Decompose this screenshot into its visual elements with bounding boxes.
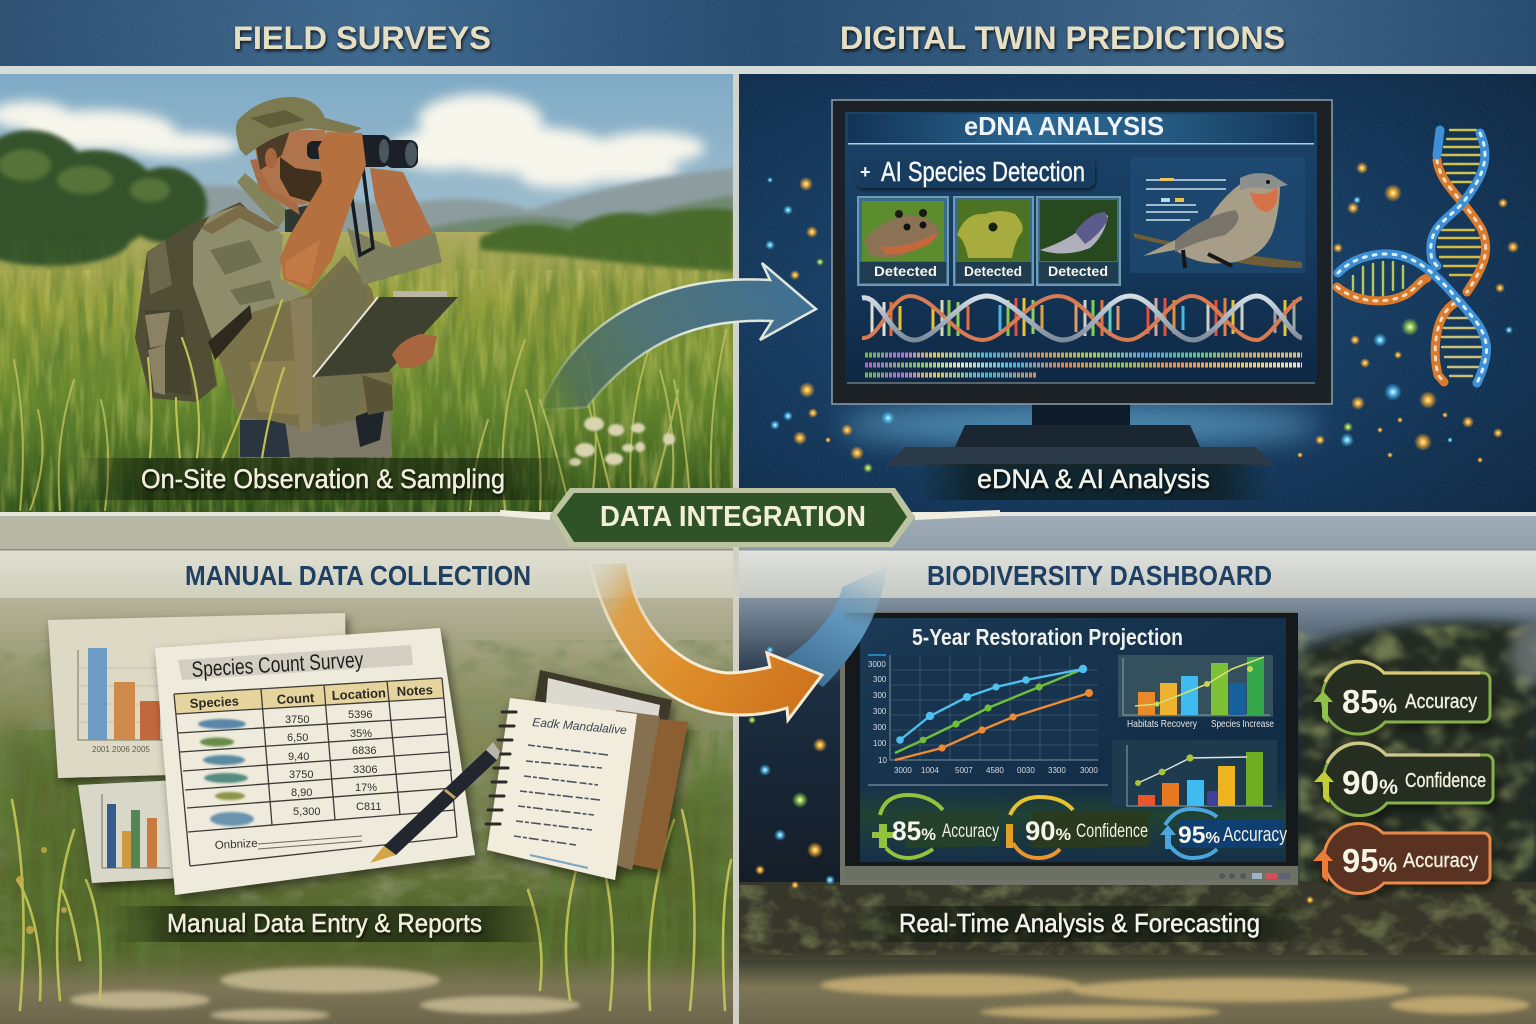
caption: on-site observation — [70, 458, 580, 500]
header band — [0, 0, 1536, 74]
line chart: projection: 1004 — [921, 766, 939, 775]
badge: 90% confidence: Confidence — [1405, 770, 1486, 792]
badge: 90% confidence: 90% — [1342, 764, 1398, 801]
binoculars — [307, 135, 418, 168]
form title: Species Count Survey — [191, 647, 364, 682]
DNA strand on screen — [862, 296, 1302, 340]
collar — [237, 173, 290, 228]
caption: manual data entry: Manual Data Entry & Reports — [167, 908, 482, 938]
caption: on-site observation: On-Site Observation & Sampling — [141, 464, 505, 494]
heading band: manual data collection: MANUAL DATA COLLECTION — [185, 560, 531, 591]
thumbnail: detected frog: Detected — [964, 263, 1022, 279]
caption: eDNA and AI analysis: eDNA & AI Analysis — [977, 464, 1210, 494]
line chart: projection: 10 — [878, 756, 887, 765]
grass in front of figure — [148, 300, 284, 460]
monitor stand — [885, 400, 1276, 466]
line chart: projection: 100 — [873, 739, 887, 748]
vest and torso — [213, 255, 393, 425]
banner: data integration — [550, 488, 915, 547]
caption: real-time analysis: Real-Time Analysis & Forecasting — [899, 908, 1260, 938]
bar chart: lower trend — [1112, 740, 1277, 807]
chart paper: small bar chart — [78, 780, 180, 883]
arrow: blue curve to dashboard — [783, 567, 887, 687]
metric: 95% accuracy on screen: 95% — [1178, 822, 1220, 849]
caption: manual data entry — [110, 906, 550, 942]
icon: large DNA helix — [1337, 130, 1487, 383]
glowing particles — [765, 162, 1519, 473]
badge: 90% confidence — [1314, 743, 1493, 816]
heading band: manual data collection — [0, 549, 734, 598]
metric: 90% confidence: Confidence — [1076, 821, 1148, 842]
table: Onbnize — [215, 838, 258, 852]
table: 6,50 — [287, 732, 308, 744]
table: 3750 — [289, 769, 313, 781]
bar chart: habitat recovery and species increase: Habitats Recovery — [1127, 718, 1198, 730]
screen title: eDNA ANALYSIS — [964, 111, 1164, 141]
line chart: projection: 3000 — [1080, 766, 1098, 775]
heading band: biodiversity dashboard — [739, 549, 1536, 598]
backpack — [135, 202, 260, 402]
badge: 85% accuracy: 85% — [1342, 683, 1397, 720]
thumbnail: detected toad: Detected — [874, 263, 937, 279]
shoulder strap — [200, 205, 280, 234]
line chart: projection: 300 — [873, 691, 887, 700]
table: C811 — [356, 801, 381, 813]
chart paper: back bar chart: 2001 2006 2005 — [92, 745, 150, 754]
table: 9,40 — [288, 751, 309, 763]
glowing particles — [748, 646, 1314, 904]
bar chart: habitat recovery and species increase: Species Increase — [1211, 718, 1274, 730]
line chart: projection: 3300 — [1048, 766, 1066, 775]
line chart: projection: 3000 — [894, 766, 912, 775]
neck and head — [250, 155, 300, 215]
line chart: projection: 300 — [873, 723, 887, 732]
banner: data integration: DATA INTEGRATION — [600, 501, 866, 533]
panel: manual data collection background — [0, 516, 734, 1024]
thumbnail: detected bird — [1037, 197, 1120, 285]
line chart: projection: 3000 — [868, 660, 886, 669]
icon: pen — [370, 742, 500, 863]
thumbnail: detected frog — [954, 197, 1033, 285]
heading: digital twin predictions: DIGITAL TWIN PREDICTIONS — [840, 20, 1285, 56]
survey form — [155, 628, 475, 895]
line chart: projection: 300 — [873, 675, 887, 684]
left forearm and hand — [280, 132, 366, 290]
badge: 85% accuracy: Accuracy — [1405, 691, 1477, 713]
shirt sleeve left — [193, 205, 307, 342]
line chart: projection: 4580 — [986, 766, 1004, 775]
dashboard monitor — [840, 612, 1298, 885]
sequence data bars — [865, 355, 1302, 375]
metric: 90% confidence: 90% — [1025, 816, 1071, 846]
table: Location — [331, 685, 386, 703]
table: 3306 — [353, 764, 377, 776]
table: Notes — [396, 682, 433, 699]
thumbnail: detected bird: Detected — [1048, 263, 1108, 279]
table: 17% — [355, 782, 377, 794]
dashboard title: 5-Year Restoration Projection — [912, 624, 1183, 650]
heading band: biodiversity dashboard: BIODIVERSITY DASHBOARD — [927, 560, 1272, 591]
line chart: projection: 0030 — [1017, 766, 1035, 775]
table: 5396 — [348, 709, 372, 721]
table: Species — [189, 693, 239, 711]
table: Count — [276, 690, 315, 707]
monitor: eDNA analysis — [832, 100, 1332, 466]
hand on clipboard — [392, 334, 437, 368]
subtitle: AI species detection: AI Species Detection — [881, 156, 1085, 187]
panel: field surveys meadow scene — [0, 74, 734, 512]
binocular strap — [350, 168, 373, 255]
table — [174, 678, 457, 866]
arrow: field data up to digital twin — [540, 263, 816, 410]
panel: digital twin background — [739, 74, 1536, 512]
metric: 95% accuracy on screen — [1160, 809, 1287, 858]
bar chart: habitat recovery and species increase — [1118, 655, 1274, 730]
illustration: perched bird with data lines — [1130, 157, 1305, 273]
metric: 90% confidence — [1006, 797, 1150, 858]
metric: 85% accuracy — [872, 795, 1000, 858]
heading: field surveys: FIELD SURVEYS — [233, 20, 491, 56]
legs — [240, 405, 392, 457]
line chart: projection: 5007 — [955, 766, 973, 775]
arrow: manual data down to dashboard — [590, 563, 822, 720]
notebook stack: Eadk Mandalalive — [532, 715, 628, 737]
chart paper: back bar chart — [48, 613, 348, 778]
caption: real-time analysis — [845, 906, 1315, 942]
thumbnail: detected toad — [858, 197, 948, 285]
metric: 85% accuracy: 85% — [892, 816, 936, 846]
table: 3750 — [285, 714, 309, 726]
caption: eDNA and AI analysis — [920, 464, 1270, 500]
line chart: projection — [868, 655, 1108, 785]
cap — [236, 97, 362, 156]
badge: 95% accuracy: Accuracy — [1403, 850, 1478, 872]
metric: 95% accuracy on screen: Accuracy — [1223, 824, 1287, 846]
subtitle: AI species detection: + — [860, 162, 871, 182]
clipboard — [313, 297, 458, 377]
badge: 95% accuracy — [1313, 823, 1490, 893]
badge: 85% accuracy — [1313, 661, 1490, 734]
table: 8,90 — [291, 787, 312, 799]
line chart: projection: 300 — [873, 707, 887, 716]
figure: field researcher with binoculars — [135, 97, 458, 460]
metric: 85% accuracy: Accuracy — [942, 821, 999, 842]
table: 5,300 — [293, 806, 321, 818]
table: 35% — [350, 728, 372, 740]
table: 6836 — [352, 745, 376, 757]
badge: 95% accuracy: 95% — [1342, 842, 1397, 879]
notebook stack — [486, 670, 688, 880]
panel: biodiversity dashboard background — [739, 516, 1536, 1024]
right arm — [370, 168, 435, 252]
